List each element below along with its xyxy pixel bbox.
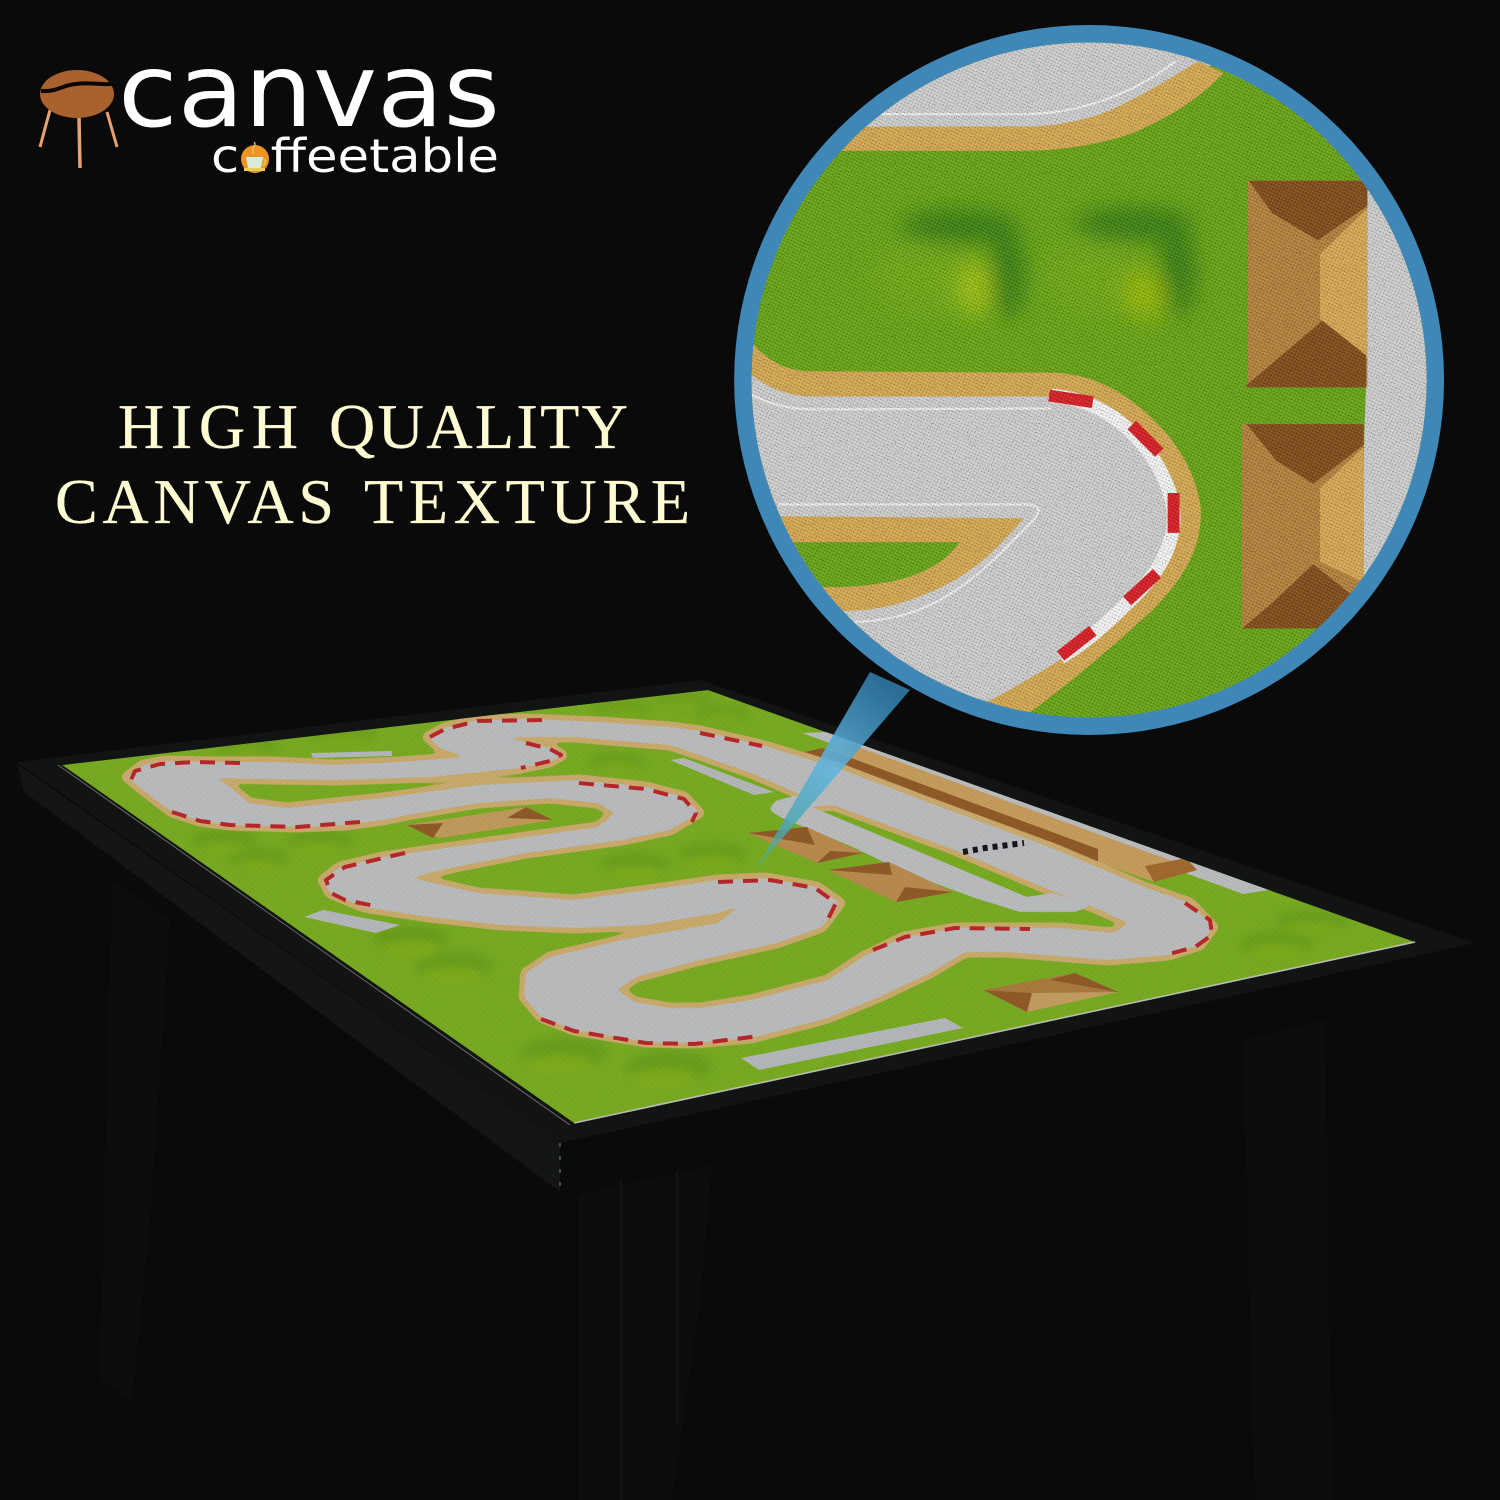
lens right asphalt (1362, 190, 1427, 579)
title word: CANVAS: CANVAS (55, 466, 334, 537)
long grandstand mound (805, 745, 1197, 882)
title word: TEXTURE: TEXTURE (364, 466, 690, 537)
title word: QUALITY: QUALITY (329, 391, 628, 462)
logo wordmark: coffeetable: coffeetable (211, 129, 499, 183)
lens island grass (793, 542, 960, 588)
title word: HIGH: HIGH (118, 391, 298, 462)
lens track lines (751, 61, 1175, 622)
back gray pad (802, 732, 1269, 894)
table edge highlights (574, 942, 1415, 1123)
pit lane (769, 795, 1093, 912)
lens top sand border (841, 61, 1224, 151)
callout pointer (755, 672, 910, 870)
circuit track surface (127, 719, 1213, 1043)
icon: coffee cup (241, 142, 269, 173)
logo wordmark: canvas: canvas (118, 32, 500, 151)
title (55, 391, 690, 537)
logo (40, 32, 500, 183)
table top: race track artwork (62, 690, 1415, 1123)
finish line checks (963, 843, 1024, 852)
gray pads (304, 751, 963, 1070)
lens grass (752, 42, 1427, 718)
left edge highlight (58, 765, 570, 1125)
table legs (100, 880, 1332, 1500)
table frame (17, 680, 1475, 1192)
lens content (752, 42, 1427, 718)
lens red kerb dashes (1049, 396, 1174, 656)
table canvas weave (62, 690, 1415, 1123)
lens lower brown mound (1242, 424, 1364, 628)
lens canvas speckle (752, 42, 1426, 718)
lens ring (734, 25, 1444, 735)
icon: coffee bean table (40, 70, 117, 168)
lens middle sand border (752, 344, 1201, 712)
lens hills (872, 208, 1195, 321)
track sand border (127, 719, 1213, 1043)
lens middle asphalt (752, 375, 1167, 702)
lens white kerb (1051, 396, 1174, 657)
grass hills (193, 693, 1348, 1087)
lens upper brown mound (1247, 181, 1367, 387)
lens top asphalt (852, 42, 1211, 140)
red kerbs (130, 720, 1212, 1044)
grass surface (62, 690, 1415, 1123)
lens canvas weave (752, 42, 1426, 718)
magnifier callout (730, 20, 1465, 755)
brown mounds (407, 807, 1118, 1012)
lens island sand (780, 516, 1024, 611)
